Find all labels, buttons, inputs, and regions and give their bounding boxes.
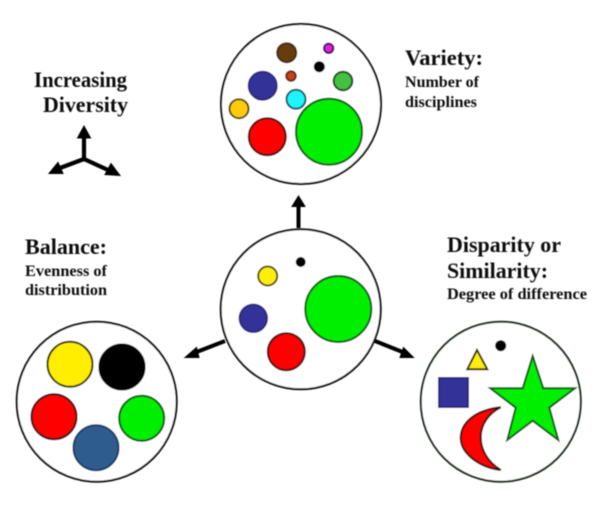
icon: yellow disc	[48, 342, 92, 387]
icon: red disc	[268, 333, 305, 370]
panel: balance circle	[17, 322, 177, 482]
icon: brown disc	[277, 43, 296, 62]
text: variety: Number of	[405, 74, 480, 91]
icon: magenta disc	[324, 44, 333, 53]
text: variety: disciplines	[405, 94, 477, 111]
icon: large green disc	[296, 99, 362, 165]
heading: increasing diversity: Increasing	[34, 67, 127, 92]
text: disparity or similarity	[447, 232, 587, 303]
panel: variety circle	[221, 24, 381, 184]
panel: central circle	[221, 229, 381, 389]
heading: increasing diversity: Diversity	[43, 92, 128, 117]
icon: rust disc	[286, 71, 296, 81]
text: variety	[405, 45, 483, 111]
text: balance: Evenness of	[25, 263, 108, 280]
arrow: left to balance	[185, 341, 225, 358]
icon: black dot	[496, 341, 505, 350]
icon: amber disc	[230, 99, 248, 118]
arrow: up to variety	[292, 196, 305, 228]
icon: green star	[490, 356, 575, 440]
heading: increasing diversity	[34, 67, 128, 117]
text: balance	[25, 234, 108, 299]
icon: green disc	[119, 396, 164, 441]
icon: cyan disc	[286, 90, 306, 109]
text: variety: Variety:	[405, 45, 483, 70]
icon: black disc	[315, 62, 324, 71]
icon: yellow disc	[258, 266, 277, 286]
icon: blue square	[439, 378, 468, 407]
text: disparity or similarity: Degree of difference	[447, 286, 587, 303]
icon: red disc	[32, 394, 76, 439]
icon: steel blue disc	[74, 425, 118, 470]
panel: disparity circle	[421, 322, 581, 482]
icon: blue disc	[240, 305, 267, 332]
icon: red disc	[249, 118, 286, 155]
text: balance: distribution	[25, 282, 107, 299]
icon: three-way arrows	[49, 126, 120, 176]
icon: mid green disc	[334, 72, 352, 90]
arrow: right to disparity	[375, 341, 414, 358]
text: disparity or similarity: Similarity:	[447, 258, 548, 283]
text: disparity or similarity: Disparity or	[447, 232, 561, 257]
icon: blue disc	[249, 72, 277, 100]
icon: red crescent	[461, 407, 501, 470]
icon: large green disc	[305, 276, 371, 342]
icon: yellow triangle	[467, 350, 487, 369]
icon: black disc	[100, 344, 144, 390]
text: balance: Balance:	[25, 234, 107, 259]
icon: black disc	[297, 258, 305, 266]
